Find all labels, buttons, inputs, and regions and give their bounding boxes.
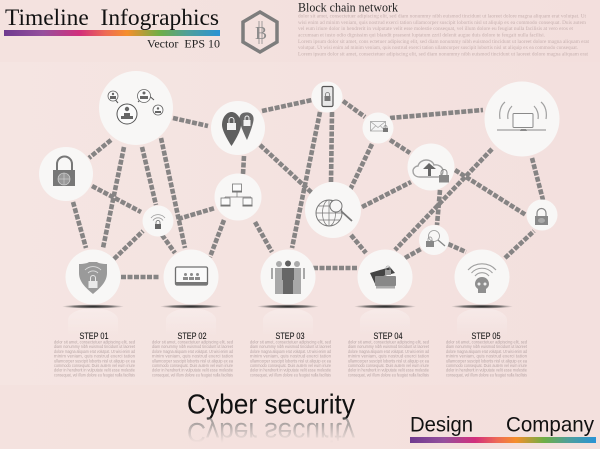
step 4 text: diam nonummy nibh euismod tincidunt ut laoreet [348,344,430,349]
step 3 text: consequat, vel illum dolore eu feugiat nulla facilisis [250,372,331,377]
node: search padlock [419,225,449,255]
subtitle: Vector EPS 10 [147,36,220,50]
header band [0,0,600,62]
footer band [0,385,600,449]
step 2 text: consequat, vel illum dolore eu feugiat nulla facilisis [152,372,233,377]
step 1 text [54,340,136,377]
header paragraph: accumsan et iusto odio dignissim qui blandit praesent luptatum zzril delenit augue duis dolore te feugait nulla facilisi. [298,32,545,38]
company name: Design: Design [410,414,473,436]
step circle 4: cards with lock [354,250,416,308]
step 5 text: ullamcorper suscipit lobortis nisl ut aliquip ex ea [446,358,528,363]
node: phone lock [312,82,342,112]
step 4 text [348,340,430,377]
step 2 text: dolor sit amet, consectetuer adipiscing elit, sed [152,340,234,344]
step 1 text: ullamcorper suscipit lobortis nisl ut aliquip ex ea [54,358,136,363]
company name: Company: Company [506,414,594,436]
node: people network [99,71,173,145]
node: envelope lock [362,112,394,144]
step 3 text [250,340,332,377]
step 2 text [152,340,234,377]
step 4 text: dolore magna aliquam erat volutpat. Ut wisi enim ad [348,349,429,354]
step 1 text: dolor sit amet, consectetuer adipiscing elit, sed [54,340,136,344]
step 4 text: dolor sit amet, consectetuer adipiscing elit, sed [348,340,430,344]
step 4 text: dolor in hendrerit in vulputate velit esse molestie [348,368,430,373]
node: wifi lock [142,206,174,236]
step 1 text: commodo consequat. Duis autem vel eum iriure [54,363,136,368]
title: Timeline Infographics [5,5,219,30]
step 3 text: dolor in hendrerit in vulputate velit esse molestie [250,368,332,373]
step 3 text: dolor sit amet, consectetuer adipiscing elit, sed [250,340,332,344]
step 1 text: dolor in hendrerit in vulputate velit esse molestie [54,368,136,373]
header paragraph: wisi enim ad minim veniam, quis nostrud exerci tation ullamcorper suscipit lobortis nisl ut aliquip ex ea commodo consequat. Duis autem [298,20,586,26]
step 3 text: dolore magna aliquam erat volutpat. Ut wisi enim ad [250,349,331,354]
step 2 text: ullamcorper suscipit lobortis nisl ut aliquip ex ea [152,358,234,363]
step 2 label: STEP 02 [178,331,206,341]
node: location pins with locks [211,101,265,155]
step 3 text: ullamcorper suscipit lobortis nisl ut aliquip ex ea [250,358,332,363]
step 2 text: dolore magna aliquam erat volutpat. Ut wisi enim ad [152,349,233,354]
header paragraph: volutpat. Ut wisi enim ad minim veniam, quis nostrud exerci tation ullamcorper suscipit lobortis nisl ut aliquip ex ea commodo consequat. [298,45,578,51]
step 2 text: diam nonummy nibh euismod tincidunt ut laoreet [152,344,234,349]
header paragraph: vel eum iriure dolor in hendrerit in vulputate velit esse molestie consequat, vel illum dolore eu feugiat nulla facilisis at vero eros et [298,25,574,32]
step 3 text: minim veniam, quis nostrud exerci tation [250,354,332,359]
node: cloud upload lock [408,144,454,190]
step 5 text: commodo consequat. Duis autem vel eum iriure [446,363,528,368]
heading reflection: Cyber security [187,417,355,448]
step 5 label: STEP 05 [472,331,500,341]
main heading: cyber security: Cyber security [187,388,355,420]
node: small padlock [526,200,558,230]
step 5 text: diam nonummy nibh euismod tincidunt ut laoreet [446,344,528,349]
dashed network connections [73,100,543,277]
step 3 label: STEP 03 [276,331,304,341]
icon: bitcoin hexagon [243,12,277,52]
step 1 text: dolore magna aliquam erat volutpat. Ut wisi enim ad [54,349,135,354]
step 1 label: STEP 01 [80,331,108,341]
header paragraph [298,14,590,58]
footer rainbow bar [410,437,596,443]
step circle 1: shield [62,250,124,308]
step 5 text: dolor sit amet, consectetuer adipiscing elit, sed [446,340,528,344]
step 4 text: consequat, vel illum dolore eu feugiat nulla facilisis [348,372,429,377]
step 1 text: minim veniam, quis nostrud exerci tation [54,354,136,359]
icon: bitcoin hexagon: B [255,23,267,43]
header paragraph: dolor sit amet, consectetuer adipiscing elit, sed diam nonummy nibh euismod tincidunt ut laoreet dolore magna aliquam erat volutpat. Ut [298,14,587,20]
step 5 text [446,340,528,377]
step 3 text: diam nonummy nibh euismod tincidunt ut laoreet [250,344,332,349]
step 5 text: dolore magna aliquam erat volutpat. Ut wisi enim ad [446,349,527,354]
step 1 text: consequat, vel illum dolore eu feugiat nulla facilisis [54,372,135,377]
step 1 text: diam nonummy nibh euismod tincidunt ut laoreet [54,344,136,349]
step 2 text: commodo consequat. Duis autem vel eum iriure [152,363,234,368]
node: padlock with globe [39,147,93,201]
step 4 text: minim veniam, quis nostrud exerci tation [348,354,430,359]
step circle 2: screen with people [160,250,222,308]
step 5 text: dolor in hendrerit in vulputate velit esse molestie [446,368,528,373]
header paragraph: Lorem ipsum dolor sit amet, consectetuer adipiscing elit, sed diam nonummy nibh euismod tincidunt ut laoreet dolore magna aliquam erat [298,52,589,58]
step 2 text: minim veniam, quis nostrud exerci tation [152,354,234,359]
node: computer network [214,174,262,220]
step circle 3: group of people [257,250,319,308]
step 4 text: commodo consequat. Duis autem vel eum iriure [348,363,430,368]
step 4 label: STEP 04 [374,331,402,341]
node: globe search [305,182,361,238]
step circle 5: wifi skull [451,250,513,308]
title rainbow bar [4,30,220,36]
header paragraph: Lorem ipsum dolor sit amet, cons ectetuer adipiscing elit, sed diam nonummy nibh euismod tincidunt ut laoreet dolore magna aliquam erat [298,39,590,45]
step 3 text: commodo consequat. Duis autem vel eum iriure [250,363,332,368]
node: monitor broadcast [484,82,560,156]
step 5 text: consequat, vel illum dolore eu feugiat nulla facilisis [446,372,527,377]
step 4 text: ullamcorper suscipit lobortis nisl ut aliquip ex ea [348,358,430,363]
circle reflections [68,308,507,336]
step 5 text: minim veniam, quis nostrud exerci tation [446,354,528,359]
step 2 text: dolor in hendrerit in vulputate velit esse molestie [152,368,234,373]
